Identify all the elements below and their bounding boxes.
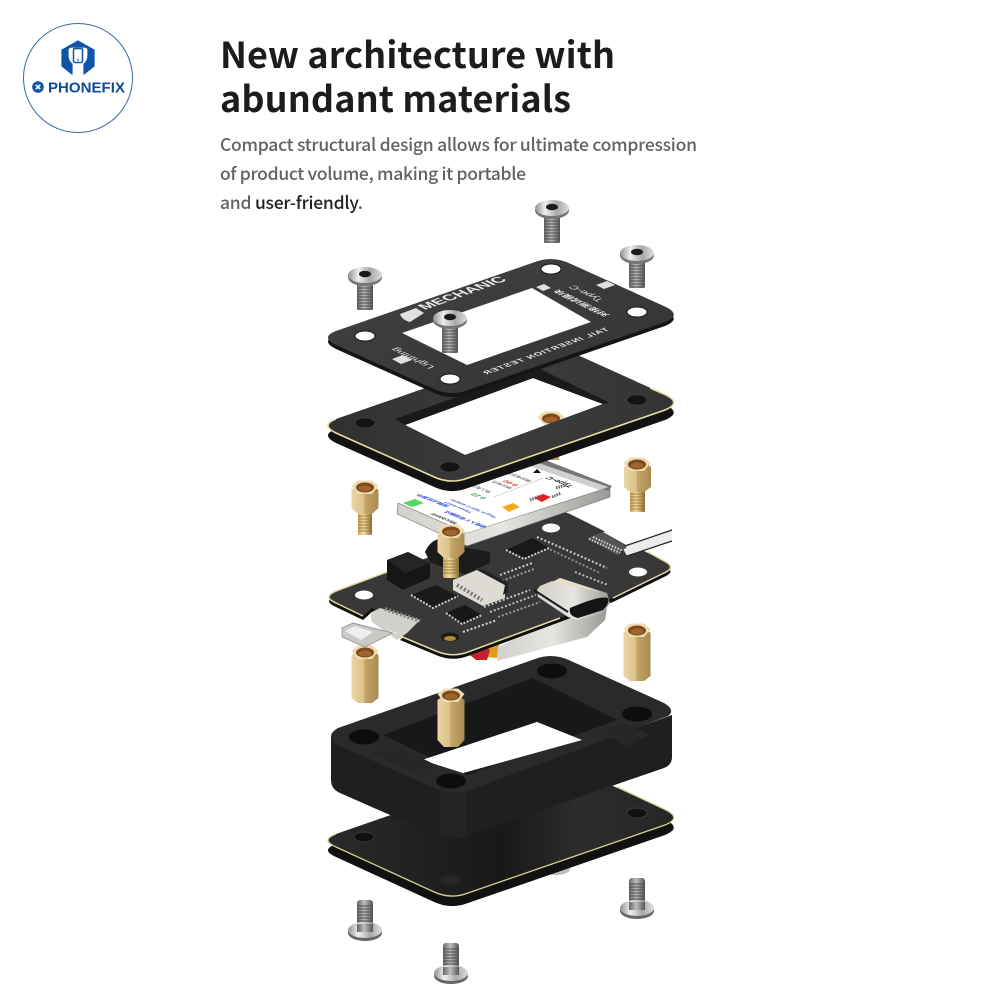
block top face (331, 656, 671, 793)
cover printed labels: TAIL INSERTION TESTER (480, 327, 612, 376)
long brass standoff front (438, 688, 464, 747)
battery indicator (403, 499, 424, 507)
cover printed labels: MECHANIC (413, 274, 510, 311)
screen labels: Please insert (442, 501, 473, 513)
white ribbon connector (453, 569, 508, 606)
chip left (411, 585, 458, 608)
title: abundant materials (220, 71, 571, 123)
screen labels: 请插入 V 母接触点 (441, 510, 490, 529)
brass standoff with thread left (352, 480, 378, 535)
screen labels: 0.23 (470, 492, 489, 500)
display glass (400, 463, 608, 533)
cover printed labels: Lightning (388, 347, 437, 370)
frame plate (328, 347, 674, 491)
frame inner ledge (395, 368, 610, 425)
black header connector (425, 538, 490, 574)
cover printed labels: 对接测试模块 (551, 288, 613, 318)
bottom screw hidden under plate (542, 863, 570, 875)
board pad rows (463, 537, 608, 632)
screen labels: 接触点检测中 (414, 493, 452, 508)
icon: wrench and phone (62, 41, 94, 74)
block side faces (331, 715, 672, 839)
chip upper (506, 538, 549, 559)
long brass standoff left (352, 646, 378, 703)
screen labels: 输出电流 (490, 480, 515, 490)
status chips (534, 494, 551, 502)
type-c flex cable (587, 528, 672, 556)
display metal frame (397, 487, 610, 546)
cover mounting holes (355, 264, 647, 384)
screen labels: Mechanic (428, 512, 460, 524)
top cover plate (328, 259, 674, 397)
cover printed labels (388, 274, 615, 376)
type-c port on board (534, 578, 610, 620)
circuit board (329, 511, 671, 659)
description text: and user-friendly. (220, 190, 363, 215)
display module (397, 458, 612, 546)
icon: x badge (32, 81, 44, 93)
lightning connector (342, 608, 420, 647)
logo wordmark: PHONEFIX (48, 80, 125, 96)
chip centre (446, 605, 482, 624)
top screws (348, 200, 654, 353)
brass standoff with thread centre (438, 524, 464, 578)
screen labels: Plug-in Type-C adapter (448, 499, 498, 518)
cover window (402, 288, 591, 365)
title (220, 27, 615, 123)
screen labels: 输出电压检测 (499, 469, 534, 483)
cover printed labels: Type-C (565, 284, 606, 303)
battery (462, 607, 607, 661)
title: New architecture with (220, 27, 615, 79)
bottom plate (328, 762, 674, 906)
hidden standoff behind frame (538, 412, 564, 460)
long brass standoff right (624, 624, 650, 681)
screen labels: 0.00 (502, 479, 521, 487)
base block (331, 656, 672, 839)
bottom screws (348, 878, 654, 984)
logo badge (24, 24, 132, 132)
screen labels: 输入电压检测 (459, 480, 494, 494)
description text: of product volume, making it portable (220, 161, 526, 186)
description text (220, 132, 697, 215)
screen labels (414, 469, 576, 529)
brass standoff with thread right (624, 458, 651, 512)
screen labels: Type-C (543, 475, 576, 488)
black switch block (387, 552, 430, 590)
description text: Compact structural design allows for ultimate compression (220, 132, 697, 157)
